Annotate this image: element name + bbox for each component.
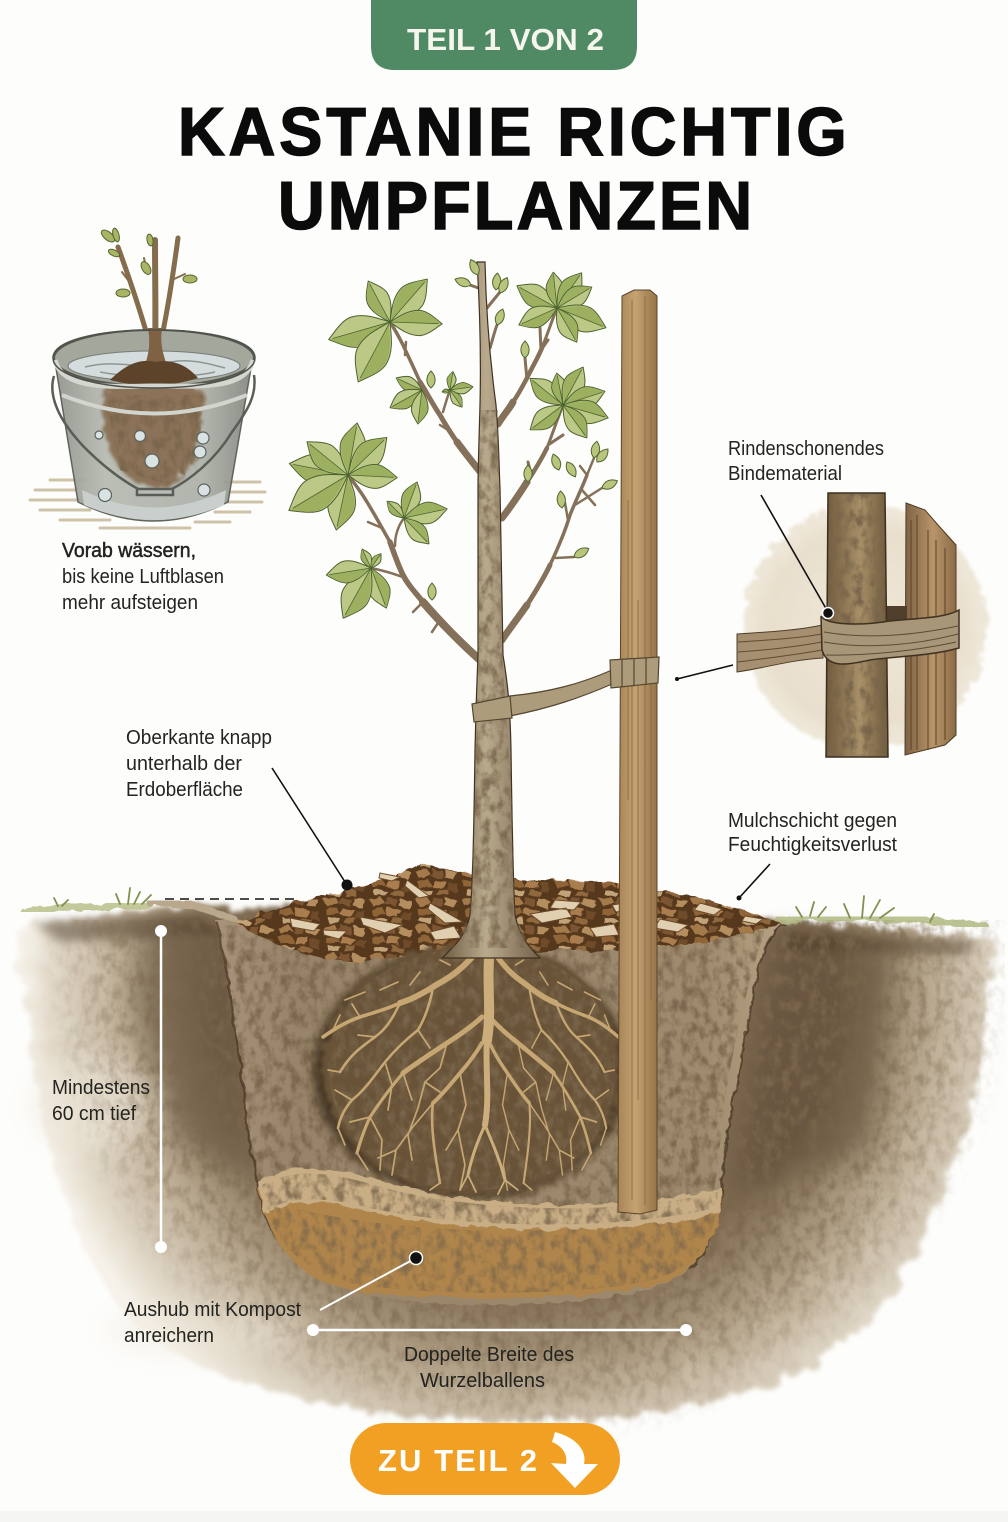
inset trunk bark — [827, 494, 887, 756]
ground shadow — [30, 480, 265, 528]
stem base — [145, 328, 168, 372]
root ball texture — [105, 395, 203, 485]
back of bucket — [54, 330, 254, 386]
bucket hoop — [62, 395, 247, 414]
root ball in water — [104, 383, 203, 487]
label: binding: Bindematerial — [728, 463, 842, 485]
roots right — [490, 945, 618, 1190]
label: mulch — [728, 810, 897, 856]
soil dark band left — [135, 925, 258, 1190]
inset strap fibres — [738, 634, 822, 662]
support stake — [618, 290, 657, 1214]
label: width: Doppelte Breite des — [404, 1344, 574, 1366]
soil dark band right — [730, 935, 895, 1200]
label: top edge: unterhalb der — [126, 753, 242, 775]
twigs — [118, 238, 185, 355]
pit walls — [215, 920, 785, 1304]
leader: top edge — [165, 768, 352, 899]
inset background — [743, 505, 987, 749]
leaf cluster G — [386, 372, 430, 425]
leaf cluster F — [325, 547, 396, 625]
root ball cast shadow — [313, 946, 629, 1198]
label: mulch: Mulchschicht gegen — [728, 810, 897, 832]
header tab: TEIL 1 VON 2 — [407, 22, 604, 57]
ball body — [322, 943, 620, 1195]
bottom edge strip — [0, 1511, 1008, 1522]
leaf cluster H — [442, 371, 474, 410]
inset stake grain — [911, 515, 945, 750]
label: width: Wurzelballens — [420, 1370, 545, 1392]
tree — [280, 258, 619, 958]
trunk — [442, 262, 540, 958]
label: top edge: Oberkante knapp — [126, 727, 272, 749]
branches — [348, 285, 602, 660]
root crown — [110, 361, 198, 386]
label: binding: Rindenschonendes — [728, 438, 884, 460]
outer soil mass — [14, 906, 996, 1421]
ball texture — [328, 947, 615, 1190]
bubbles — [95, 430, 210, 502]
compost top layer — [258, 1168, 722, 1229]
leader: mulch — [736, 864, 770, 900]
title — [178, 95, 851, 244]
compost texture — [262, 1200, 718, 1293]
bucket leaves — [99, 227, 197, 297]
label: depth: 60 cm tief — [52, 1103, 136, 1125]
leaf cluster E — [383, 479, 449, 550]
tree tie — [472, 657, 659, 722]
bucket caption: bis keine Luftblasen — [62, 566, 224, 588]
next button: ZU TEIL 2 — [378, 1443, 537, 1478]
rim outline — [53, 330, 255, 388]
label: compost: anreichern — [124, 1325, 214, 1347]
label: top edge: Erdoberfläche — [126, 779, 243, 801]
soil texture — [10, 920, 1005, 1450]
root ball — [322, 943, 620, 1195]
compost top texture — [262, 1174, 718, 1225]
inset strap — [737, 625, 823, 672]
icon: arrow — [551, 1432, 598, 1488]
detail inset: binding material — [737, 493, 987, 757]
leader: compost — [320, 1252, 422, 1310]
bucket illustration — [30, 227, 265, 528]
leaf cluster A — [324, 270, 443, 390]
label: binding — [728, 438, 884, 485]
leaf buds — [427, 258, 619, 600]
inset band — [821, 610, 959, 664]
roots left — [323, 945, 482, 1190]
leader: binding — [761, 495, 834, 618]
pit wall texture — [220, 925, 765, 1262]
header tab — [371, 0, 637, 70]
bark texture — [452, 410, 530, 948]
bucket bottom water — [82, 490, 226, 520]
soil cross-section — [10, 906, 1005, 1450]
leader: inset connector — [675, 665, 733, 681]
label backing: depth — [32, 1059, 152, 1151]
bucket handle — [52, 375, 255, 495]
label: top edge — [126, 727, 272, 801]
width marker — [307, 1324, 692, 1336]
water ripples — [85, 361, 225, 376]
title: UMPFLANZEN — [278, 169, 755, 244]
label: mulch: Feuchtigkeitsverlust — [728, 834, 897, 856]
grass at ground level — [22, 888, 985, 926]
inset trunk — [826, 493, 888, 757]
pit cut edges — [217, 922, 785, 1270]
labels and leader lines — [52, 438, 897, 1392]
leaf cluster C — [524, 362, 611, 444]
label backing: compost — [105, 1306, 305, 1354]
soil top shading right — [785, 932, 980, 955]
bucket caption: mehr aufsteigen — [62, 592, 198, 614]
soil top shading left — [35, 914, 225, 942]
water surface — [68, 351, 240, 381]
label: depth — [52, 1077, 150, 1125]
light leaf flakes — [290, 873, 763, 940]
leaf cluster D — [280, 421, 398, 533]
label: width — [404, 1344, 574, 1392]
leaf cluster B — [512, 267, 611, 347]
inset stake — [905, 503, 956, 755]
label: depth: Mindestens — [52, 1077, 150, 1099]
next button — [350, 1423, 620, 1495]
bucket caption — [62, 540, 224, 614]
label: compost: Aushub mit Kompost — [124, 1299, 301, 1321]
label: compost — [124, 1299, 301, 1347]
inset gap shadow — [886, 606, 907, 624]
compost bed — [258, 1171, 722, 1298]
bucket caption: Vorab wässern, — [62, 540, 196, 562]
central taproot — [460, 945, 518, 1194]
mulch layer — [236, 864, 782, 962]
bucket body — [56, 368, 251, 521]
inset band fibres — [824, 626, 958, 655]
depth marker — [155, 925, 167, 1253]
title: KASTANIE RICHTIG — [178, 95, 851, 170]
front rim — [55, 360, 253, 386]
